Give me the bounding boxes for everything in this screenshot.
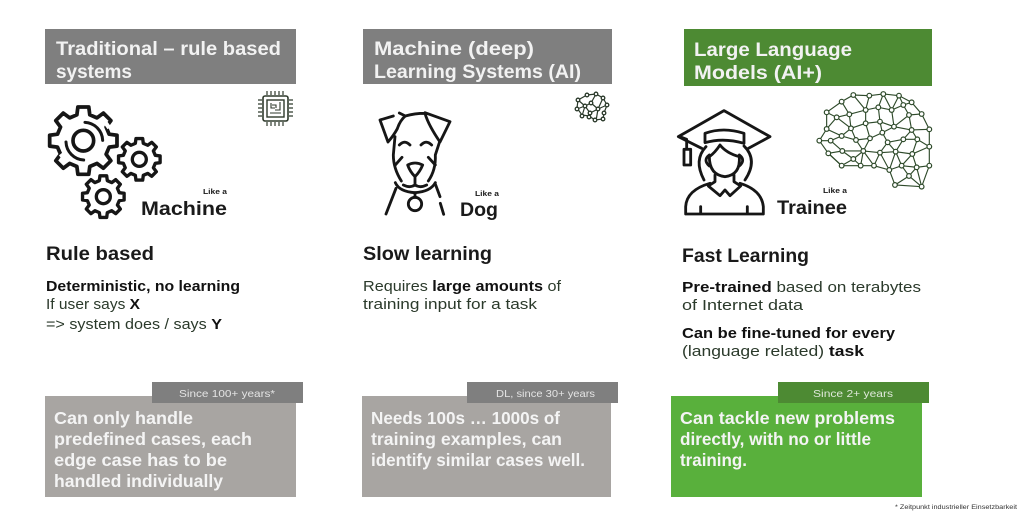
heading: large language models (684, 29, 932, 86)
icon: graduate trainee (678, 111, 770, 214)
text block: deterministic: => system does / says Y (46, 316, 222, 333)
text block: deterministic (46, 278, 240, 333)
heading: large language models: Models (AI+) (694, 62, 822, 84)
panel: large language models (671, 29, 932, 497)
footnote: * Zeitpunkt industrieller Einsetzbarkeit (895, 504, 1017, 511)
panel: machine deep learning systems (362, 29, 618, 497)
heading: machine deep learning (363, 29, 612, 84)
callout: training examples: DL, since 30+ years (496, 388, 595, 400)
panel: traditional rule based systems (45, 29, 303, 497)
label: like a machine: Like a (203, 187, 228, 196)
heading: machine deep learning: Machine (deep) (374, 38, 534, 60)
heading: rule based: Rule based (46, 243, 154, 265)
callout: new problems: Since 2+ years (813, 388, 893, 400)
label: like a dog (460, 189, 500, 221)
right gear (119, 139, 160, 180)
label: like a trainee: Like a (823, 186, 848, 195)
callout: new problems: directly, with no or little (680, 429, 871, 449)
heading: machine deep learning: Learning Systems (AI) (374, 61, 581, 83)
label: like a trainee (777, 186, 848, 219)
callout: predefined cases: edge case has to be (54, 450, 227, 470)
text block: pre-trained (682, 279, 921, 360)
label: like a machine (141, 187, 228, 220)
callout: new problems (671, 382, 929, 497)
text block: large amounts (363, 278, 562, 313)
heading: traditional: systems (56, 61, 132, 83)
heading: fast learning: Fast Learning (682, 245, 809, 267)
text block: deterministic: If user says X (46, 296, 140, 313)
icon: dog (380, 113, 450, 214)
text block: large amounts: Requires large amounts of (363, 278, 562, 295)
icon: small neural network (575, 92, 609, 122)
text block: pre-trained: (language related) task (682, 343, 865, 360)
text block: pre-trained: Pre-trained based on terabytes (682, 279, 921, 296)
callout: predefined cases: Since 100+ years* (179, 388, 275, 400)
heading: slow learning: Slow learning (363, 243, 492, 265)
icon: chip (258, 91, 293, 126)
text block: pre-trained: Can be fine-tuned for every (682, 325, 896, 342)
icon: gears (50, 107, 160, 217)
bottom gear (83, 176, 124, 217)
label: like a machine: Machine (141, 198, 227, 220)
callout: predefined cases: handled individually (54, 471, 223, 491)
callout: new problems: training. (680, 450, 747, 470)
callout: training examples: identify similar cases well. (371, 450, 585, 470)
icon: brain network (817, 92, 932, 189)
large gear (50, 107, 117, 174)
heading: traditional (45, 29, 296, 84)
label: like a dog: Dog (460, 199, 498, 221)
heading: traditional: Traditional – rule based (56, 38, 281, 60)
callout: predefined cases: predefined cases, each (54, 429, 252, 449)
heading: large language models: Large Language (694, 39, 852, 61)
label: like a dog: Like a (475, 189, 500, 198)
text block: deterministic: Deterministic, no learning (46, 278, 240, 295)
callout: new problems: Can tackle new problems (680, 408, 895, 428)
callout: predefined cases: Can only handle (54, 408, 193, 428)
text block: large amounts: training input for a task (363, 296, 538, 313)
callout: training examples (362, 382, 618, 497)
text block: pre-trained: of Internet data (682, 297, 804, 314)
callout: training examples: training examples, can (371, 429, 562, 449)
callout: predefined cases (45, 382, 303, 497)
label: like a trainee: Trainee (777, 197, 847, 219)
callout: training examples: Needs 100s … 1000s of (371, 408, 560, 428)
